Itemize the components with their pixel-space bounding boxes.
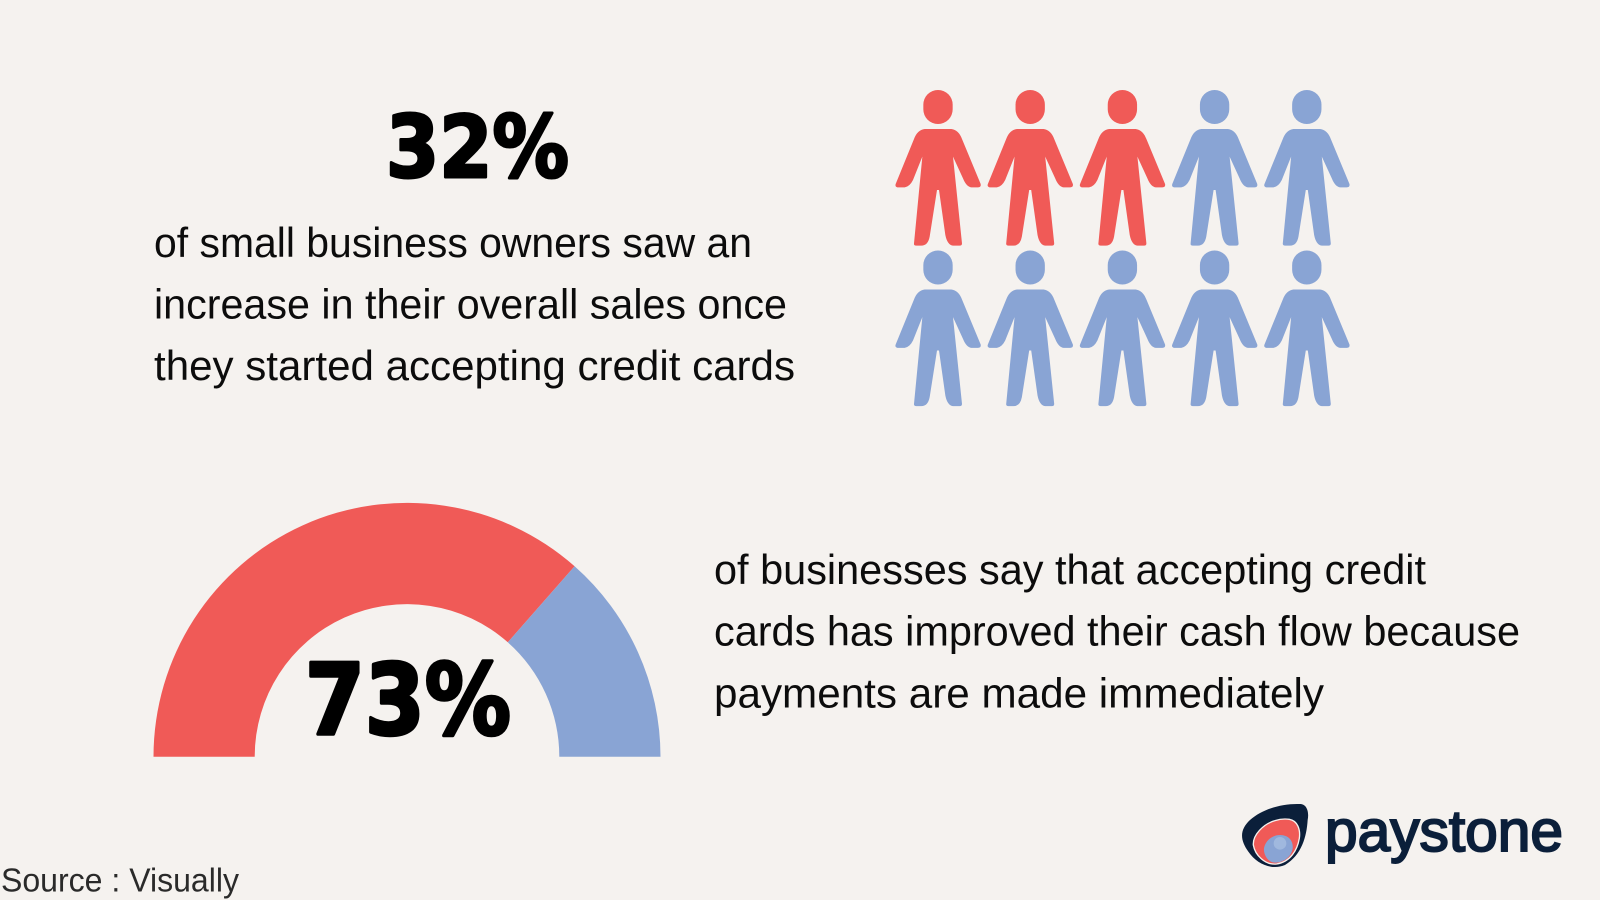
icon: paystone mark <box>1242 804 1308 867</box>
icon: people row 2 <box>895 250 1350 406</box>
text block: small business owners: of small business owners saw an <box>154 219 752 266</box>
gauge segment: 73 percent <box>154 503 575 757</box>
source note: Source : Visually <box>1 862 239 898</box>
heading: 32%: 32% <box>386 98 569 198</box>
logo: paystone <box>1242 799 1563 867</box>
text block: cash flow: payments are made immediately <box>714 669 1324 716</box>
text block: small business owners: increase in their overall sales once <box>154 280 787 328</box>
pictogram: 3 of 10 people highlighted <box>895 90 1350 406</box>
chart: 73 percent half-donut gauge <box>154 503 660 758</box>
text block: small business owners <box>154 219 795 389</box>
panel: 32 percent statistic <box>154 98 795 389</box>
logo wordmark: paystone <box>1325 799 1563 864</box>
heading: 73%: 73% <box>305 644 511 758</box>
gauge segment: remainder <box>508 566 660 757</box>
icon: people row 1 <box>895 90 1350 246</box>
text block: small business owners: they started accepting credit cards <box>154 342 795 389</box>
text block: cash flow: cards has improved their cash flow because <box>714 608 1520 655</box>
text block: cash flow <box>714 546 1520 716</box>
text block: cash flow: of businesses say that accepting credit <box>714 546 1426 593</box>
